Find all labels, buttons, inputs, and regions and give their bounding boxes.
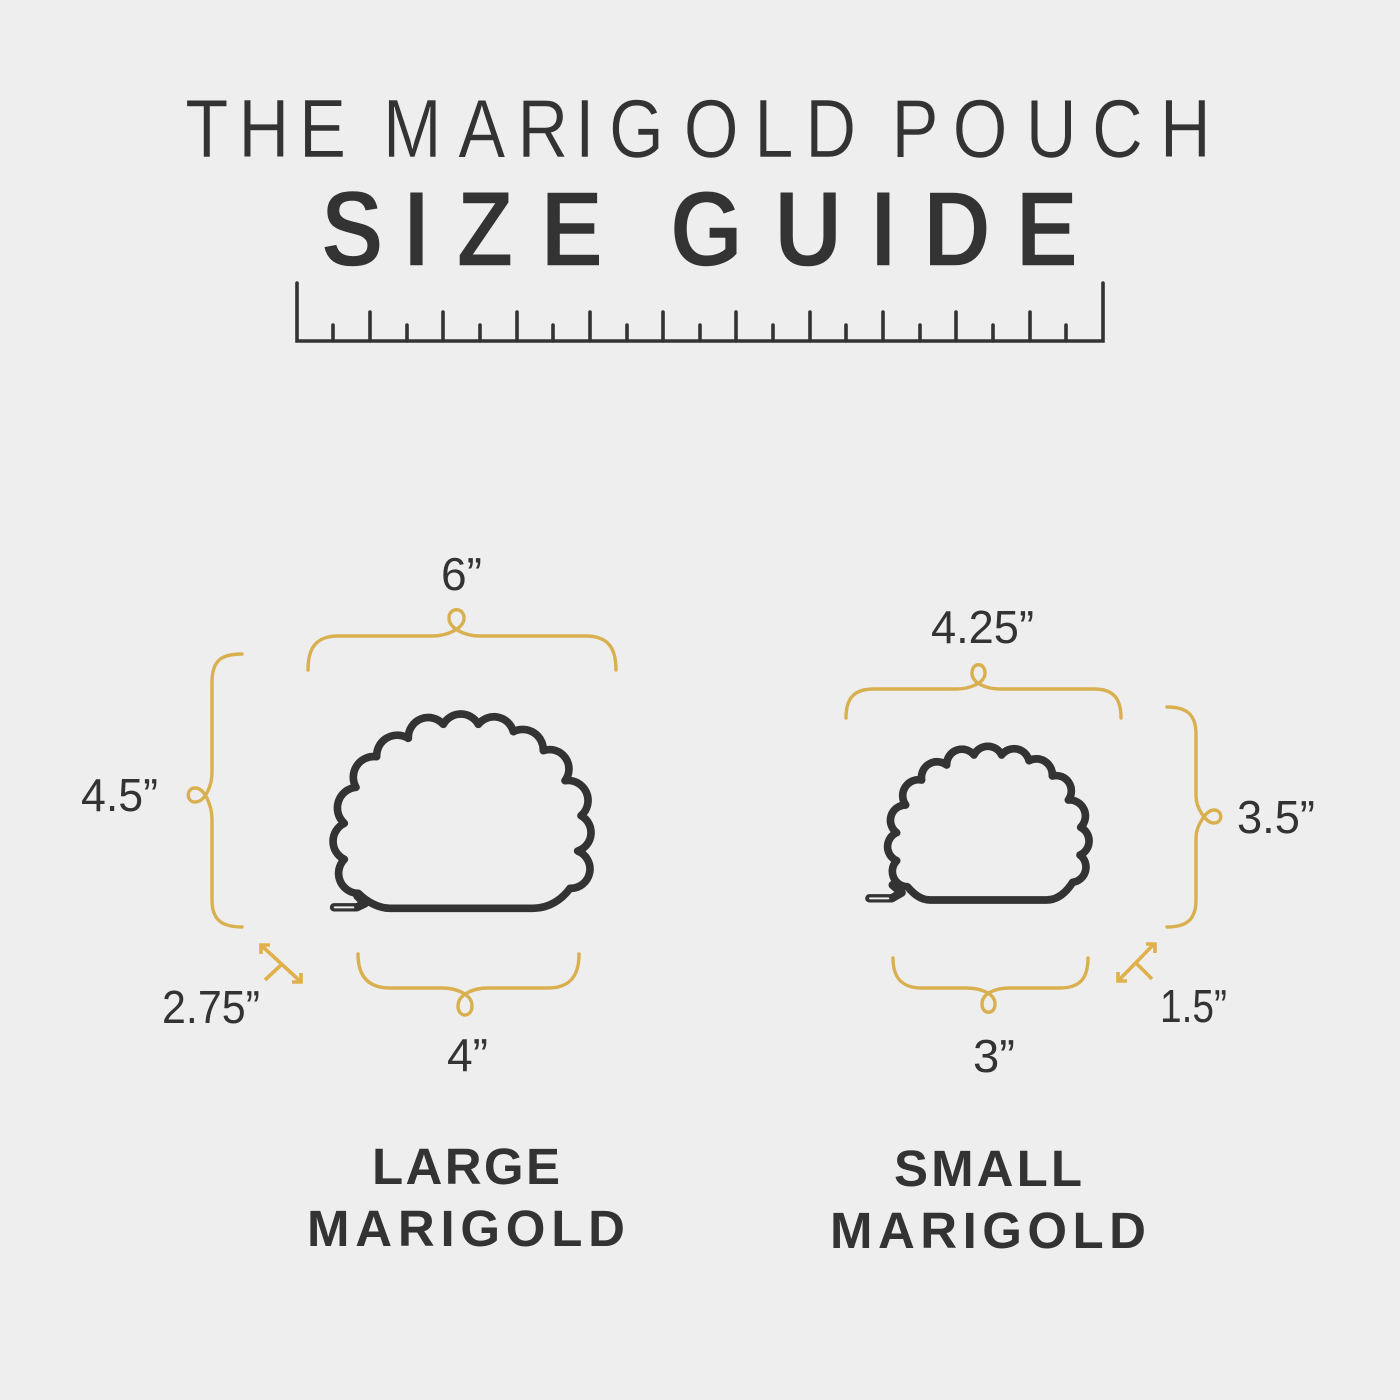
label: 4.5 inch: 4.5” — [81, 769, 158, 821]
label: 2.75 inch: 2.75” — [162, 981, 260, 1033]
icon: small pouch outline — [869, 746, 1089, 900]
label: large marigold: MARIGOLD — [307, 1200, 625, 1257]
small marigold diagram — [830, 601, 1315, 1259]
arrow: 1.5 inch depth — [1118, 944, 1155, 981]
brace: 3.5 inch height — [1167, 707, 1221, 927]
arrow: 2.75 inch depth — [261, 945, 301, 982]
label: 6 inch: 6” — [441, 548, 482, 600]
label: 3.5 inch: 3.5” — [1237, 791, 1315, 843]
label: small marigold — [830, 1140, 1146, 1259]
large marigold diagram — [81, 548, 625, 1257]
brace: 4.25 inch width — [846, 665, 1121, 718]
label: 1.5 inch: 1.5” — [1160, 980, 1227, 1032]
icon: large pouch outline — [333, 714, 591, 908]
ruler — [297, 283, 1103, 341]
label: 3 inch: 3” — [973, 1030, 1015, 1082]
label: 4 inch: 4” — [447, 1029, 488, 1081]
heading: size guide: SIZE GUIDE — [321, 169, 1078, 289]
label: large marigold: LARGE — [372, 1138, 560, 1195]
title: the marigold pouch: THE MARIGOLD POUCH — [185, 83, 1211, 175]
brace: 4.5 inch height — [188, 654, 242, 927]
brace: 3 inch base — [893, 958, 1088, 1012]
brace: 6 inch width — [308, 610, 616, 670]
label: large marigold — [307, 1138, 625, 1257]
label: small marigold: MARIGOLD — [830, 1202, 1146, 1259]
label: small marigold: SMALL — [894, 1140, 1082, 1197]
label: 4.25 inch: 4.25” — [931, 601, 1034, 653]
brace: 4 inch base — [358, 954, 579, 1015]
